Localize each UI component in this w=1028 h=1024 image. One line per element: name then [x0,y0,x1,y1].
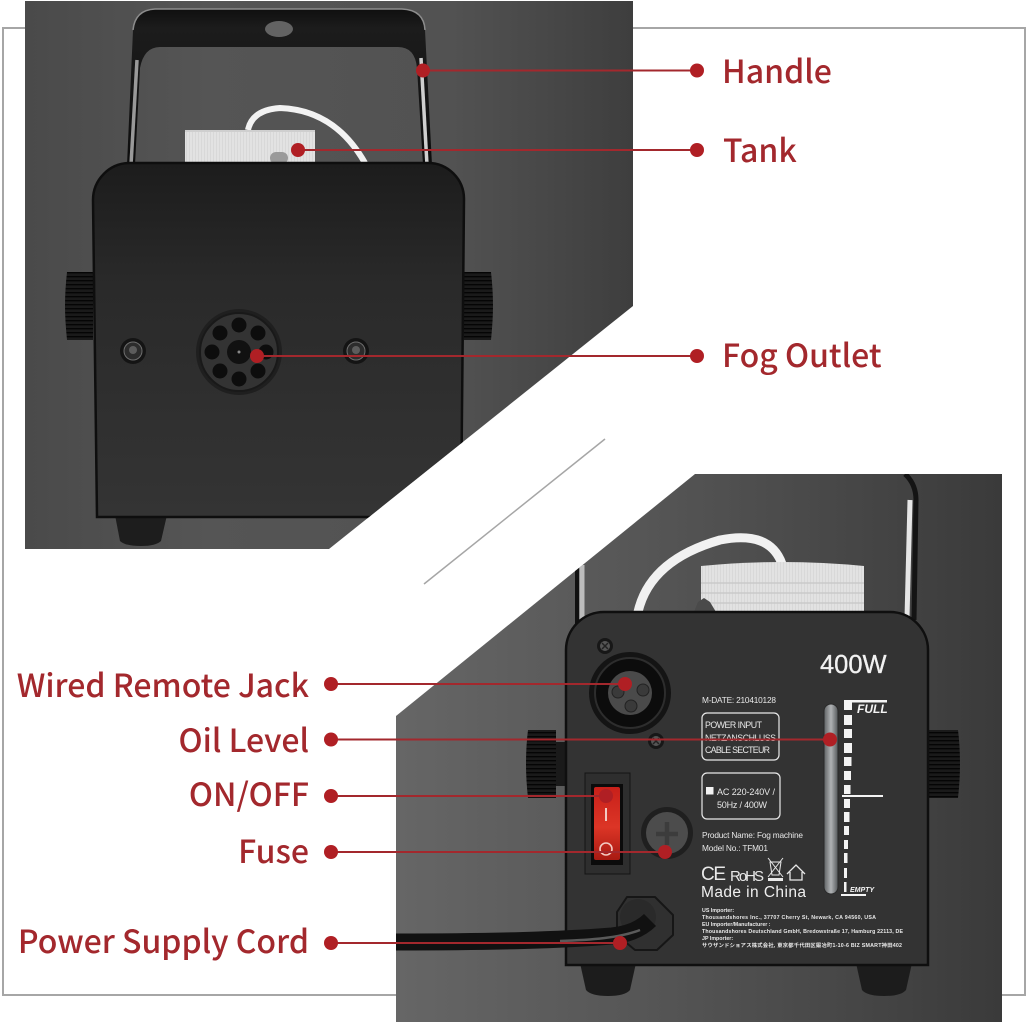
specification text: 50Hz / 400W [717,800,768,810]
callout: handle [416,47,832,93]
importer details: JP Importer: [702,936,733,942]
callout: power supply cord: Power Supply Cord [18,917,309,963]
cord gland [617,897,673,950]
oil level gauge: EMPTY [850,887,875,894]
certification marks: RoHS [730,868,764,885]
importer details: サウザンドショアス株式会社, 東京都千代田区鍛冶町1-10-6 BIZ SMART神田402 [702,941,902,949]
oil level gauge [841,700,888,896]
callout: on/off [189,770,613,816]
callout: oil level [178,716,837,762]
specification text: Model No.: TFM01 [702,843,768,853]
callout: tank [291,126,797,172]
machine body [93,163,464,517]
callout: wired remote jack: Wired Remote Jack [17,661,310,707]
oil level tube [824,704,838,894]
specification text: Product Name: Fog machine [702,830,803,840]
callout: fuse [238,827,672,873]
certification marks: CE [701,864,726,885]
diagonal divider line [424,439,605,584]
knobs [65,272,493,340]
specification text: CABLE SECTEUR [705,745,770,755]
made in china: Made in China [701,884,806,901]
callout: fuse: Fuse [238,827,309,873]
specification text: NETZANSCHLUSS [705,733,776,743]
oil level gauge: FULL [857,702,888,716]
knobs [526,730,960,798]
certification marks [702,858,806,881]
callout: power supply cord [18,917,627,963]
handle [127,9,432,165]
screws [120,338,369,364]
panel: rear view of fog machine [396,474,1002,1022]
fog outlet [196,309,282,395]
rocker switch [585,773,630,874]
specification text [702,695,803,853]
tank [185,108,365,164]
callout: fog outlet: Fog Outlet [722,331,882,377]
power cord [396,920,650,942]
importer details [702,908,903,949]
tank [638,538,864,613]
panel: front view of fog machine [25,1,633,549]
importer details: EU Importer/Manufacturer : [702,922,771,928]
body screws [597,638,664,749]
callout: handle: Handle [722,47,832,93]
foot [116,518,166,546]
callout: on/off: ON/OFF [189,770,309,816]
importer details: US Importer: [702,908,734,914]
handle [577,474,916,625]
feet [580,963,912,996]
specification text: POWER INPUT [705,720,763,730]
fuse holder [641,807,693,859]
specification text: AC 220-240V / [717,787,775,797]
importer details: Thousandshores Inc., 37707 Cherry St, Newark, CA 94560, USA [702,915,876,921]
wired remote jack [589,652,671,734]
callout: oil level: Oil Level [178,716,309,762]
callout: wired remote jack [17,661,632,707]
machine body [566,612,928,965]
callout: tank: Tank [723,126,797,172]
importer details: Thousandshores Deutschland GmbH, Bredowstraße 17, Hamburg 22113, DE [702,929,903,935]
400W rating: 400W [820,651,887,679]
specification text: M-DATE: 210410128 [702,695,776,705]
callout: fog outlet [250,331,882,377]
